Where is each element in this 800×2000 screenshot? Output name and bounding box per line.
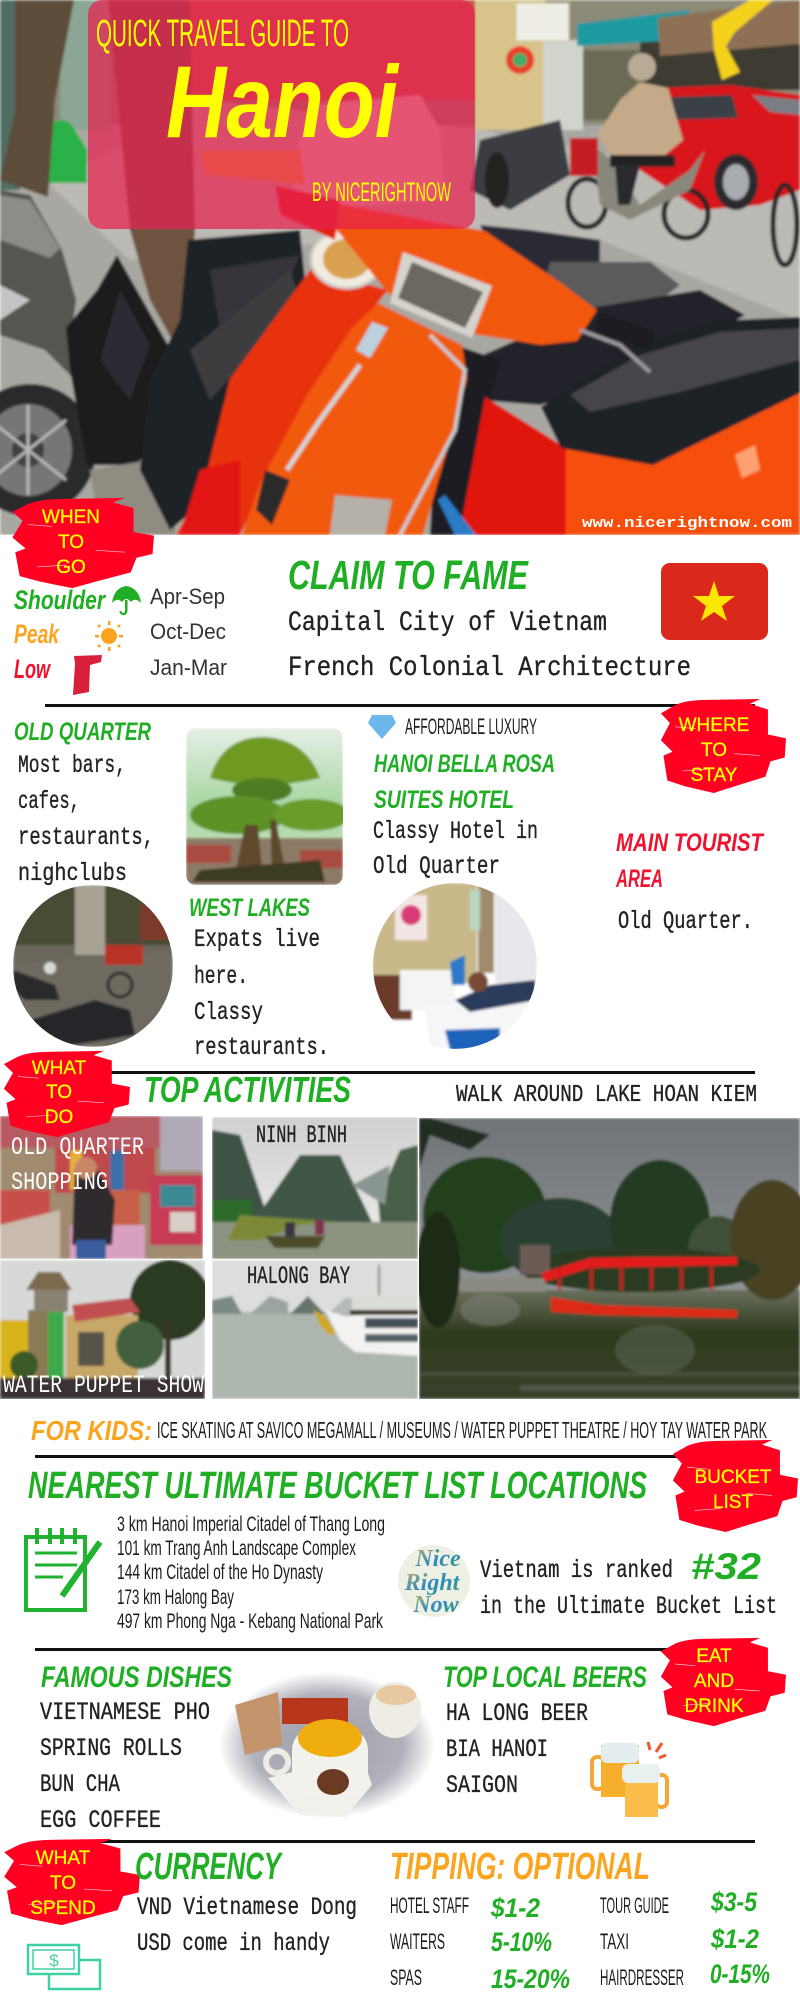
bucket list locations [117, 1513, 385, 1633]
badge: what to do [4, 1051, 130, 1137]
icon: umbrella [112, 586, 141, 615]
panel: famous dishes: SPRING ROLLS [40, 1734, 182, 1763]
panel: claim to fame [288, 552, 768, 684]
badge: eat and drink: EAT [696, 1646, 732, 1667]
label: OLD QUARTER [11, 1133, 144, 1162]
panel: famous dishes [40, 1661, 232, 1835]
red front scooter [176, 269, 388, 535]
orange handlebar head unit [332, 203, 597, 345]
panel: ranking: #32 [691, 1546, 761, 1587]
icon: notepad and pencil [26, 1528, 100, 1610]
heading: WEST LAKES [189, 894, 310, 922]
label: WATER PUPPET SHOW [3, 1371, 204, 1400]
panel: ranking [480, 1546, 777, 1621]
tipping table: amounts: 0-15% [710, 1959, 770, 1989]
pavement [90, 455, 180, 535]
heading: CLAIM TO FAME [288, 552, 529, 598]
motorbike and rider [568, 179, 606, 227]
dish list: VIETNAMESE PHO [40, 1698, 210, 1727]
tipping table: amounts: 5-10% [491, 1927, 552, 1957]
description: Old Quarter. [618, 907, 753, 936]
tipping table: service labels: TAXI [600, 1929, 629, 1954]
badge: where to stay: STAY [691, 765, 738, 786]
black gap [428, 346, 490, 535]
badge: what to spend: TO [50, 1873, 76, 1894]
badge: when to go: WHEN [42, 507, 100, 528]
building backdrop [0, 0, 800, 125]
hotel name: HANOI BELLA ROSA [374, 750, 555, 778]
panel: main tourist area: AREA [615, 865, 663, 893]
icon: Nice Right Now logo: Right [404, 1570, 461, 1596]
photo: egg coffee [219, 1672, 435, 1818]
orange main shield [242, 303, 467, 535]
for kids line [31, 1415, 767, 1446]
bucket list locations: 144 km Citadel of the Ho Dynasty [117, 1561, 323, 1584]
panel: top local beers: BIA HANOI [446, 1735, 548, 1764]
tipping table: amounts: $1-2 [710, 1924, 759, 1954]
panel: affordable luxury hotel [368, 714, 555, 1050]
big orange rear and seat [566, 393, 800, 535]
description: restaurants, [18, 823, 154, 852]
panel: famous dishes: EGG COFFEE [40, 1806, 161, 1835]
beer list: HA LONG BEER [446, 1699, 588, 1728]
heading: FOR KIDS: [31, 1415, 152, 1446]
photo: hotel room [372, 883, 537, 1050]
icon: Nice Right Now logo [398, 1545, 470, 1618]
panel: currency: USD come in handy [137, 1929, 330, 1958]
peak season label: Peak [14, 619, 60, 649]
byline: BY NICERIGHTNOW [312, 177, 451, 207]
badge: what to spend: SPEND [30, 1898, 96, 1919]
badge: what to spend [4, 1839, 140, 1925]
badge: where to stay: WHERE [679, 715, 749, 736]
badge: what to do: TO [46, 1082, 72, 1103]
yellow spiral balloon [712, 0, 773, 80]
panel: top local beers: SAIGON [446, 1771, 518, 1800]
green taxi [48, 120, 87, 183]
bucket list locations: 173 km Halong Bay [117, 1586, 234, 1609]
description: Most bars, [18, 751, 126, 780]
dark parked scooters [140, 230, 305, 530]
fame facts: Capital City of Vietnam [288, 608, 607, 639]
rectangular headlight [390, 252, 492, 338]
panel: affordable luxury hotel: SUITES HOTEL [374, 786, 514, 814]
badge: what to spend: WHAT [36, 1848, 91, 1869]
tipping table: service labels: WAITERS [390, 1929, 445, 1954]
shoulder season label: Shoulder [14, 585, 106, 615]
season dates: Jan-Mar [150, 655, 227, 680]
panel: famous dishes: BUN CHA [40, 1770, 120, 1799]
shop signs [516, 3, 569, 41]
badge: eat and drink: DRINK [684, 1696, 744, 1717]
photo: Lake Hoan Kiem and red bridge [416, 1118, 800, 1399]
handlebar grip and lever [595, 312, 655, 350]
panel: top local beers [443, 1661, 667, 1817]
street surface [50, 100, 800, 320]
season dates: Oct-Dec [150, 619, 226, 644]
red rear body [459, 397, 566, 535]
panel: west lakes: restaurants. [194, 1033, 329, 1062]
label: HALONG BAY [247, 1262, 350, 1291]
panel: old quarter [13, 718, 173, 1047]
icon: diamond [368, 715, 396, 739]
panel: seasons [14, 584, 227, 695]
season dates: Apr-Sep [150, 584, 225, 609]
badge: bucket list: BUCKET [694, 1467, 772, 1488]
badge: what to do: DO [45, 1107, 73, 1128]
tipping table: service labels: HOTEL STAFF [390, 1893, 469, 1918]
heading: top activities: TOP ACTIVITIES [144, 1069, 351, 1110]
tipping table: service labels: HAIRDRESSER [600, 1965, 684, 1990]
badge: when to go: GO [56, 557, 86, 578]
badge: when to go [12, 498, 154, 588]
photo: old quarter shopping: SHOPPING [11, 1168, 108, 1197]
panel: west lakes: Classy [194, 998, 263, 1027]
tipping table: amounts: 15-20% [491, 1964, 570, 1994]
icon: Nice Right Now logo: Now [412, 1592, 460, 1618]
heading: TOP LOCAL BEERS [443, 1661, 647, 1694]
bucket list locations: 101 km Trang Anh Landscape Complex [117, 1537, 356, 1560]
tipping table: service labels [390, 1893, 684, 1990]
panel: west lakes: here. [194, 962, 248, 991]
tipping table: amounts: $3-5 [710, 1887, 758, 1917]
icon: scarf [73, 655, 102, 695]
panel: currency [28, 1846, 357, 1989]
currency notes: VND Vietnamese Dong [137, 1893, 357, 1922]
heading: MAIN TOURIST [616, 829, 765, 857]
badge: bucket list: LIST [713, 1492, 753, 1513]
white car behind panel [290, 95, 445, 210]
badge: where to stay [661, 699, 786, 793]
badge: eat and drink [661, 1638, 786, 1726]
badge: what to do: WHAT [32, 1058, 87, 1079]
icon: banknotes [28, 1945, 100, 1989]
description [18, 751, 154, 888]
blue fender [438, 495, 476, 535]
icon: Vietnam flag [661, 563, 768, 640]
photo: water puppet theatre [0, 1260, 210, 1400]
panel: west lakes [189, 894, 329, 1062]
black rubbish bags [66, 255, 170, 465]
heading: TIPPING: OPTIONAL [390, 1846, 650, 1888]
rear black motorbike [479, 224, 602, 276]
icon: Nice Right Now logo: Nice [414, 1546, 461, 1572]
tipping table: amounts: $1-2 [490, 1893, 540, 1923]
low season label: Low [14, 654, 51, 684]
tipping table: service labels: TOUR GUIDE [600, 1893, 669, 1918]
photo: old quarter shopping [0, 1116, 203, 1259]
label: NINH BINH [256, 1121, 347, 1150]
pink title panel [88, 0, 475, 229]
panel: tipping [390, 1846, 770, 1994]
round headlight [311, 230, 383, 288]
title: quick travel guide: QUICK TRAVEL GUIDE TO [96, 13, 349, 55]
background motorbikes [470, 120, 570, 210]
icon: beer mugs [592, 1742, 667, 1817]
heading: FAMOUS DISHES [41, 1661, 232, 1694]
icon: sun [95, 621, 123, 651]
description: nighclubs [18, 859, 127, 888]
title: Hanoi: Hanoi [166, 45, 400, 159]
tree trunks [0, 0, 74, 197]
season dates [150, 584, 227, 680]
description: Expats live [194, 925, 320, 954]
tipping table: service labels: SPAS [390, 1965, 422, 1990]
photo: Halong Bay [212, 1260, 418, 1399]
website url: www.nicerightnow.com [582, 515, 792, 532]
panel: main tourist area [615, 829, 765, 936]
panel: affordable luxury hotel: Old Quarter [373, 852, 500, 881]
photo: Ninh Binh [212, 1117, 418, 1259]
photo: old quarter street [13, 885, 173, 1047]
bucket list locations: 497 km Phong Nga - Kebang National Park [117, 1610, 383, 1633]
tipping table: amounts [490, 1887, 770, 1994]
badge: where to stay: TO [701, 740, 727, 761]
icon: banknotes: $ [49, 1951, 59, 1970]
description: cafes, [18, 787, 80, 816]
heading: CURRENCY [135, 1846, 283, 1888]
first seat [467, 290, 745, 405]
panel: claim to fame: French Colonial Architecture [288, 653, 691, 684]
badge: eat and drink: AND [694, 1671, 734, 1692]
label: AFFORDABLE LUXURY [405, 714, 537, 739]
left silver motorbike [0, 188, 77, 376]
red car [617, 85, 800, 210]
badge: when to go: TO [58, 532, 84, 553]
bucket list locations: 3 km Hanoi Imperial Citadel of Thang Long [117, 1513, 385, 1536]
heading: OLD QUARTER [14, 718, 151, 746]
hotel description: Classy Hotel in [373, 817, 538, 846]
photo: bonsai tree by lake [186, 728, 350, 885]
badge: bucket list [673, 1440, 798, 1532]
panel: ranking: Vietnam is ranked [480, 1556, 673, 1585]
hero photo: parked orange scooters on Hanoi street [0, 0, 800, 535]
